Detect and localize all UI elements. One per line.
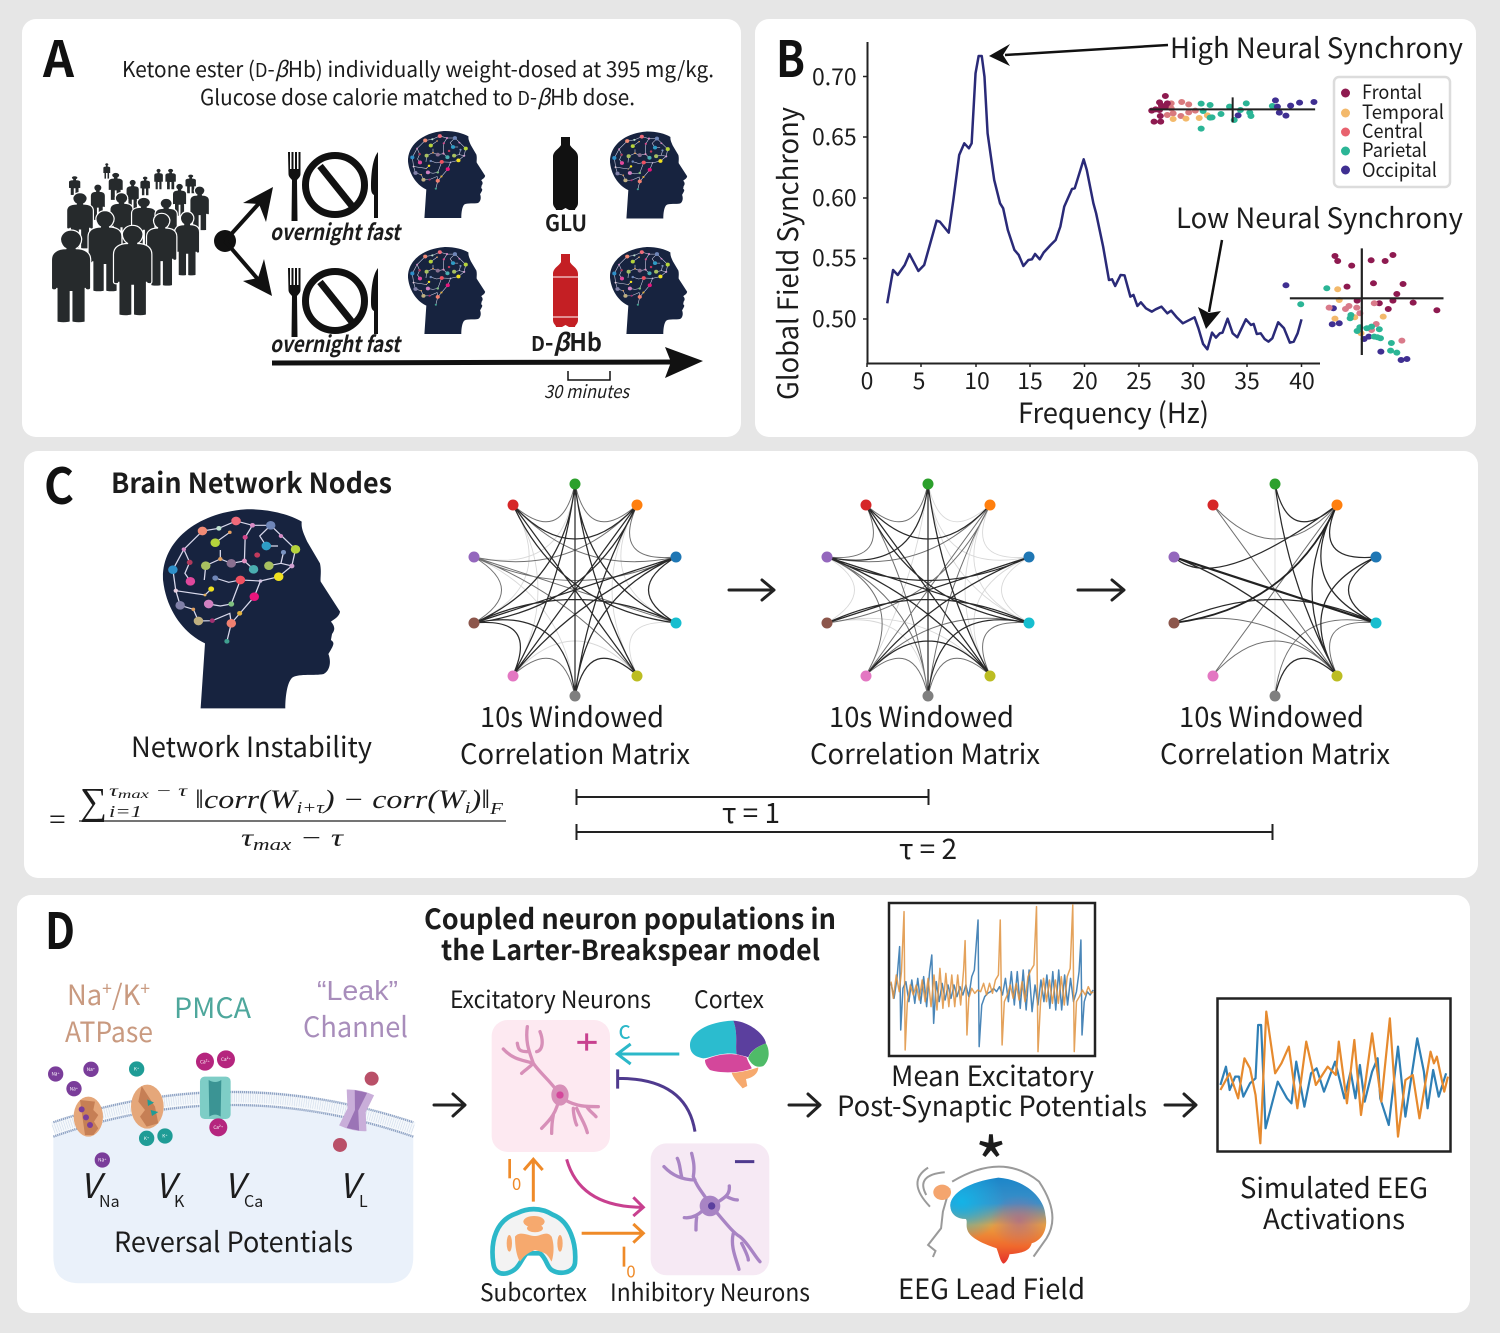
chart axes and tick labels: 40 (1289, 362, 1315, 396)
x axis title: Frequency (Hz) (1018, 392, 1209, 432)
chart axes and tick labels: 35 (1234, 362, 1260, 396)
label: High Neural Synchrony: High Neural Synchrony (1170, 27, 1463, 67)
bracket: tau 2: τ = 2 (899, 828, 957, 868)
arrow to high synchrony peak (989, 44, 1168, 66)
network instability formula: i=1 (109, 802, 142, 821)
label: overnight fast top: overnight fast (270, 215, 402, 247)
caption: graph 2 (810, 696, 1040, 773)
label: Mean Excitatory Post-Synaptic Potentials: Mean Excitatory (891, 1055, 1094, 1095)
network graph 3 (1168, 478, 1382, 702)
network instability formula: max (253, 835, 292, 854)
reversal potential symbols: Na (99, 1188, 120, 1212)
ions: K⁺ (144, 1136, 150, 1142)
network instability formula (47, 781, 506, 854)
reversal potential symbols: Ca (244, 1188, 263, 1212)
label: GLU: GLU (545, 206, 587, 238)
caption: graph 3: 10s Windowed (1179, 696, 1364, 736)
PMCA pump (200, 1077, 231, 1119)
arrow: cortical coupling c (617, 1011, 679, 1064)
chart axes and tick labels: 5 (913, 362, 925, 396)
chart axes and tick labels: 0 (861, 362, 873, 396)
icon: crowd of participants (51, 163, 209, 323)
label: Subcortex: Subcortex (480, 1273, 587, 1308)
icon: no food bottom (288, 268, 378, 337)
icon: red ketone bottle (553, 254, 578, 327)
low synchrony scatter (1282, 248, 1444, 363)
bracket: tau 2 (576, 824, 1272, 868)
labels: channel names (65, 974, 408, 1051)
panel letter C: C (44, 447, 74, 519)
panel B: global field synchrony chart (755, 19, 1476, 437)
bracket: tau 1 (576, 789, 928, 832)
arrow: excitatory to inhibitory (567, 1159, 643, 1216)
arrow: graph 2 to 3 (1078, 580, 1124, 600)
arrow: graph 1 to 2 (729, 580, 774, 600)
ions: Ca²⁺ (221, 1056, 232, 1063)
label: Mean Excitatory Post-Synaptic Potentials: Post-Synaptic Potentials (837, 1085, 1147, 1125)
caption: graph 3: Correlation Matrix (1160, 733, 1390, 773)
caption: graph 3 (1160, 696, 1390, 773)
icon: black glucose bottle (553, 137, 578, 210)
network instability formula: = (47, 803, 67, 836)
arrow: subcortex to inhibitory: 0 (626, 1258, 636, 1282)
panel letter B: B (776, 20, 805, 92)
ions: Na⁺ (51, 1072, 60, 1078)
reversal potential symbols: L (359, 1188, 368, 1212)
chart axes and tick labels: 25 (1126, 362, 1152, 396)
excitatory neuron box (492, 1020, 610, 1152)
labels: channel names: Na (67, 974, 103, 1014)
dosing description: Glucose dose calorie matched to D-βHb dose. (200, 81, 635, 112)
icon: no food top (288, 152, 378, 221)
arrow: to simulated EEG (1165, 1094, 1196, 1116)
heading: Brain Network Nodes: Brain Network Nodes (111, 462, 392, 502)
leak channel (339, 1088, 374, 1133)
inhibitory neuron box (651, 1143, 769, 1275)
heading: Larter-Breakspear model: the Larter-Breakspear model (441, 929, 820, 969)
bracket: tau 1: τ = 1 (722, 792, 780, 832)
legend: brain regions (1334, 76, 1450, 187)
arrow to low synchrony trough (1198, 240, 1222, 329)
network graph 2 (822, 478, 1034, 702)
label: Simulated EEG Activations (1240, 1167, 1428, 1238)
chart axes and tick labels: 30 (1180, 362, 1206, 396)
label: Low Neural Synchrony: Low Neural Synchrony (1176, 197, 1463, 237)
reversal potential symbols: V (155, 1159, 181, 1208)
labels: channel names: + (140, 975, 150, 1001)
network instability formula: )‖ (468, 785, 490, 814)
reversal potential symbols: K (174, 1188, 185, 1212)
panel letter A: A (42, 20, 75, 92)
panel C: brain network instability (24, 447, 1478, 878)
network instability formula: τ (241, 825, 250, 852)
chart axes and tick labels: 15 (1017, 362, 1043, 396)
ions: Ca²⁺ (200, 1058, 211, 1065)
network instability formula: F (489, 799, 504, 818)
arrow: inhibitory feedback (618, 1069, 695, 1132)
chart axes and tick labels: 0.70 (812, 58, 857, 92)
icon: head with brain network, top right (610, 132, 687, 219)
network instability formula: − τ (149, 783, 189, 800)
neuron population schematic (492, 1011, 769, 1282)
ions: Ca²⁺ (213, 1124, 224, 1131)
spectrum curve (887, 56, 1302, 349)
caption: graph 1: Correlation Matrix (460, 733, 690, 773)
label: Network Instability: Network Instability (131, 726, 372, 766)
arrow: subcortex to excitatory (510, 1159, 543, 1202)
label: Simulated EEG Activations: Simulated EEG (1240, 1167, 1428, 1207)
arrow: subcortex to inhibitory (582, 1224, 643, 1282)
panel letter D: D (45, 892, 75, 964)
branching arrows (214, 187, 273, 296)
high synchrony scatter (1148, 93, 1317, 132)
chart axes and tick labels: 10 (964, 362, 990, 396)
label: Reversal Potentials: Reversal Potentials (114, 1221, 353, 1261)
network instability formula: ‖corr(W (195, 785, 277, 814)
timeline arrow (272, 347, 703, 378)
chart axes and tick labels: 20 (1072, 362, 1098, 396)
heading: Larter-Breakspear model: Coupled neuron populations in (424, 898, 836, 938)
network instability formula: i (465, 798, 471, 817)
dosing description (122, 53, 714, 112)
label: overnight fast bottom: overnight fast (270, 327, 402, 359)
reversal potential symbols: V (80, 1159, 106, 1208)
legend: brain regions: Central (1362, 115, 1423, 144)
convolution symbol: * (975, 1110, 1007, 1211)
arrow: subcortex to excitatory: 0 (512, 1171, 521, 1195)
labels: channel names: ATPase (65, 1011, 153, 1051)
network instability formula: ∑ (80, 781, 107, 823)
caption: graph 2: Correlation Matrix (810, 733, 1040, 773)
icon: head with brain network, bottom left (408, 247, 485, 334)
chart axes and tick labels: 0.60 (812, 179, 857, 213)
reversal potential symbols: V (339, 1159, 365, 1208)
30 minute scale bar: 30 minutes (544, 378, 630, 404)
ions: K⁺ (162, 1134, 168, 1140)
reversal potential symbols: V (224, 1159, 250, 1208)
legend: brain regions: Temporal (1362, 96, 1444, 125)
caption: graph 2: 10s Windowed (829, 696, 1014, 736)
ions (48, 1050, 379, 1168)
network instability formula: max (118, 787, 150, 801)
caption: graph 1: 10s Windowed (480, 696, 664, 736)
Na/K pump right (131, 1085, 164, 1129)
chart axes and tick labels: 0.50 (812, 300, 857, 334)
heading: Larter-Breakspear model (424, 898, 836, 969)
icon: head with brain network, top left (408, 131, 485, 218)
label: Mean Excitatory Post-Synaptic Potentials (837, 1055, 1147, 1125)
y axis title: Global Field Synchrony (767, 107, 807, 400)
icon: subcortex (493, 1209, 575, 1274)
chart axes and tick labels: 0.65 (812, 118, 857, 152)
label: EEG Lead Field: EEG Lead Field (898, 1268, 1085, 1308)
panel D: neural mass model (17, 892, 1470, 1313)
ions: Na⁺ (98, 1158, 107, 1164)
arrow: to neuron populations (434, 1094, 465, 1116)
caption: graph 1 (460, 696, 690, 773)
ions: K⁺ (134, 1067, 140, 1073)
labels: channel names: + (102, 975, 112, 1001)
icon: EEG lead field head (917, 1167, 1052, 1264)
chart: mean excitatory post-synaptic potentials (889, 903, 1095, 1056)
label: Excitatory Neurons: Excitatory Neurons (450, 980, 651, 1015)
dosing description: Ketone ester (D-βHb) individually weight-dosed at 395 mg/kg. (122, 53, 714, 84)
chart axes and tick labels: 0.55 (812, 239, 857, 273)
network instability formula: ) − corr(W (321, 785, 468, 814)
reversal potential symbols (80, 1159, 368, 1212)
legend: brain regions: Occipital (1362, 154, 1437, 183)
membrane and cell interior (48, 1050, 413, 1283)
labels: channel names: PMCA (174, 987, 251, 1027)
Na/K pump left (74, 1097, 103, 1137)
label: Inhibitory Neurons: Inhibitory Neurons (610, 1273, 810, 1308)
icon: large head with brain nodes (163, 509, 340, 708)
chart: simulated EEG activations (1218, 998, 1450, 1152)
labels: channel names: Channel (303, 1006, 408, 1046)
ions: Na⁺ (70, 1086, 79, 1092)
labels: channel names: /K (112, 974, 140, 1014)
icon: cortex brain (690, 1021, 769, 1088)
arrow: cortical coupling c: c (618, 1011, 631, 1046)
legend: brain regions: Frontal (1362, 76, 1422, 105)
label: D-betaHb: D-βHb (531, 323, 602, 358)
label: Simulated EEG Activations: Activations (1263, 1198, 1405, 1238)
legend: brain regions: Parietal (1362, 134, 1427, 163)
label: Cortex: Cortex (694, 980, 764, 1015)
arrow: into potentials (789, 1094, 820, 1116)
ions: Na⁺ (87, 1067, 96, 1073)
network instability formula: i+τ (296, 798, 325, 817)
icon: head with brain network, bottom right (610, 247, 687, 334)
chart axes and tick labels (812, 42, 1320, 396)
network instability formula: − τ (291, 825, 344, 852)
network graph 1 (468, 478, 682, 702)
panel A: study protocol (22, 19, 741, 437)
labels: channel names: “Leak” (317, 975, 398, 1006)
network instability formula: τ (109, 783, 115, 800)
